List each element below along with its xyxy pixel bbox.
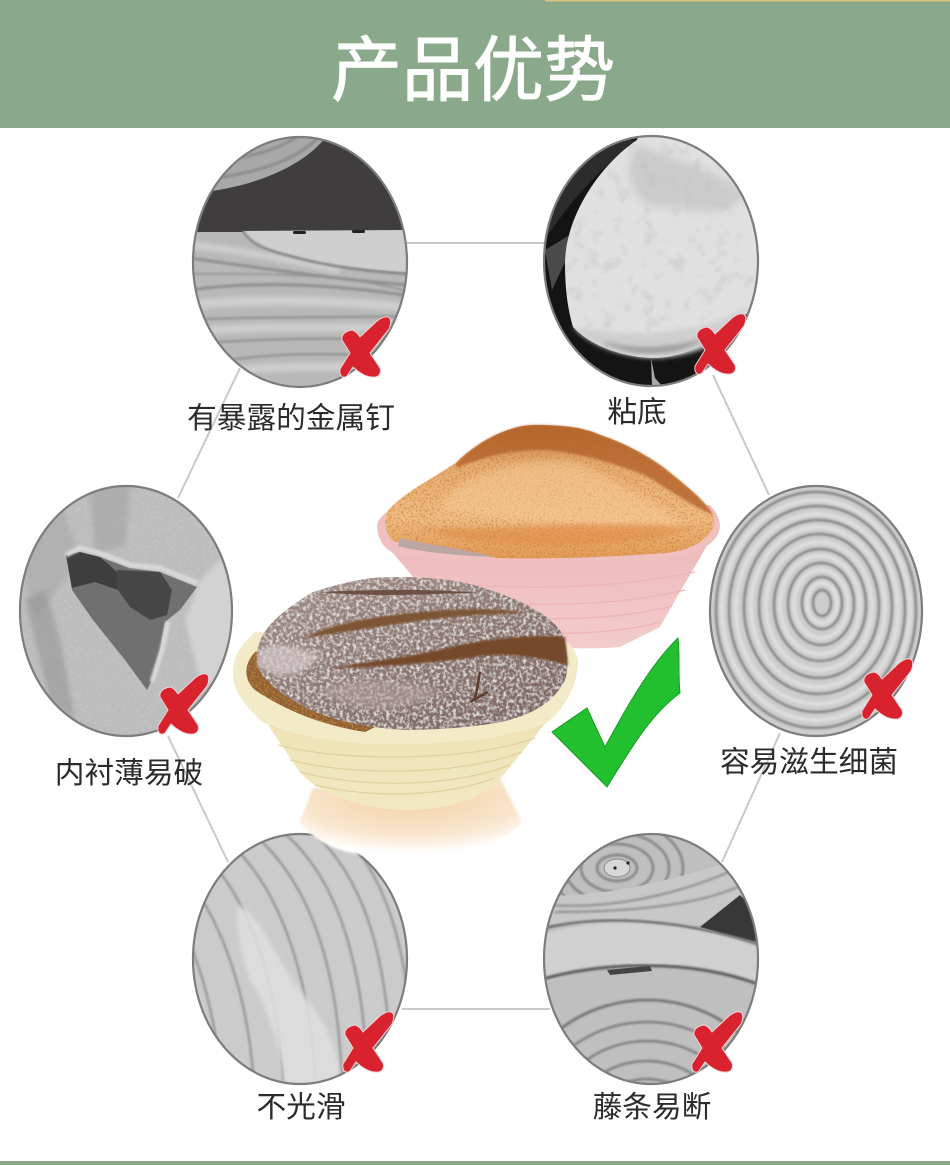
yellow bowl with dark sourdough loaf — [233, 577, 578, 810]
panel: breeds bacteria (spiral rings) — [705, 480, 930, 779]
icon: red cross — [340, 317, 391, 377]
panel: exposed metal nails — [185, 130, 410, 435]
pink bowl — [377, 505, 720, 648]
bottom strip — [0, 1161, 950, 1165]
golden bread loaf — [385, 425, 714, 558]
label: 粘底 — [607, 396, 667, 429]
icon: red cross — [158, 674, 209, 734]
panel: rattan breaks easily — [542, 832, 760, 1120]
header band — [0, 0, 950, 128]
icon: red cross — [862, 659, 913, 719]
crumb under loaf — [246, 640, 430, 732]
hexagon connector lines — [168, 243, 780, 1009]
title: 产品优势 — [331, 32, 615, 111]
panel: rough surface — [192, 832, 408, 1120]
panel: thin torn lining — [15, 480, 240, 790]
icon: red cross — [692, 1012, 743, 1072]
icon: red cross — [695, 314, 746, 374]
pink bowl with golden bread — [377, 425, 720, 648]
label: 容易滋生细菌 — [720, 746, 898, 779]
icon: red cross — [343, 1012, 394, 1072]
icon: green check mark — [552, 638, 680, 787]
panel: sticks to the bottom — [540, 130, 765, 429]
loaf slashes — [258, 590, 568, 709]
yellow bowl — [233, 632, 578, 810]
label: 内衬薄易破 — [55, 757, 203, 790]
label: 有暴露的金属钉 — [187, 402, 395, 435]
dark loaf — [257, 577, 567, 730]
label: 藤条易断 — [593, 1091, 711, 1124]
label: 不光滑 — [256, 1091, 346, 1124]
soft shadow under yellow bowl — [300, 778, 522, 857]
